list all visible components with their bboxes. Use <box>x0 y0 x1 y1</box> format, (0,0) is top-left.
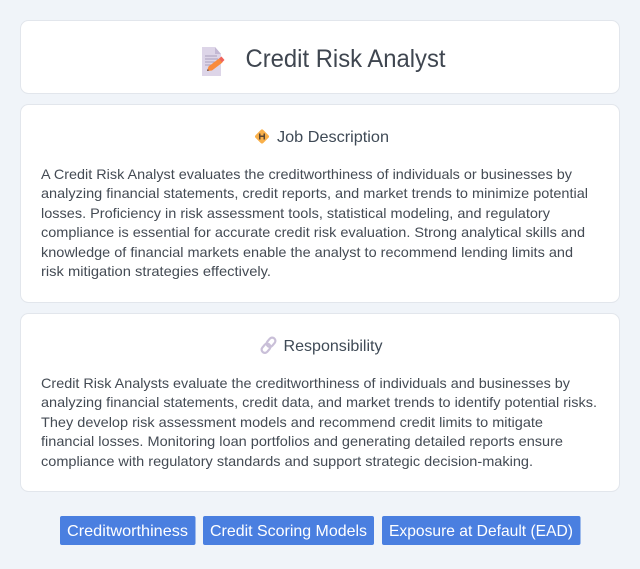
text block: job description: losses. Proficiency in risk assessment tools, statistical modeling, and regulatory <box>41 205 550 221</box>
text block: responsibility <box>41 375 597 469</box>
text block: job description: risk mitigation strategies effectively. <box>41 263 271 279</box>
heading: responsibility: Responsibility <box>284 338 382 355</box>
text block: job description <box>41 166 588 279</box>
text block: responsibility: Credit Risk Analysts evaluate the creditworthiness of individuals and businesses by <box>41 375 570 391</box>
icon: chain link <box>260 336 277 354</box>
heading: job description: Job Description <box>277 129 389 146</box>
heading: title: Credit Risk Analyst <box>246 45 446 73</box>
icon: puzzle diamond <box>254 129 270 144</box>
text block: job description: A Credit Risk Analyst evaluates the creditworthiness of individuals or businesses by <box>41 166 572 182</box>
tag: creditworthiness: Creditworthiness <box>67 523 188 540</box>
text block: responsibility: compliance with regulatory standards and support strategic decision-making. <box>41 453 533 469</box>
panel: job description <box>20 104 620 302</box>
text block: responsibility: financial losses. Monitoring loan portfolios and generating detailed reports ensure <box>41 433 563 449</box>
panel: title <box>20 20 620 94</box>
tag: exposure at default: Exposure at Default (EAD) <box>389 523 573 540</box>
icon: document with pencil <box>202 47 224 76</box>
text block: responsibility: analyzing financial statements, credit data, and market trends to identify potential risks. <box>41 394 597 410</box>
text block: job description: knowledge of financial markets enable the analyst to recommend lending limits and <box>41 244 573 260</box>
tag: credit scoring models <box>203 516 374 545</box>
tag: creditworthiness <box>60 516 196 545</box>
text block: job description: compliance is essential for accurate credit risk evaluation. Strong analytical skills and <box>41 224 585 240</box>
panel: responsibility <box>20 314 620 492</box>
tag: exposure at default <box>382 516 580 545</box>
text block: job description: analyzing financial statements, credit reports, and market trends to minimize potential <box>41 185 588 201</box>
text block: responsibility: They develop risk assessment models and recommend credit limits to mitigate <box>41 414 543 430</box>
tag: credit scoring models: Credit Scoring Models <box>210 523 367 540</box>
